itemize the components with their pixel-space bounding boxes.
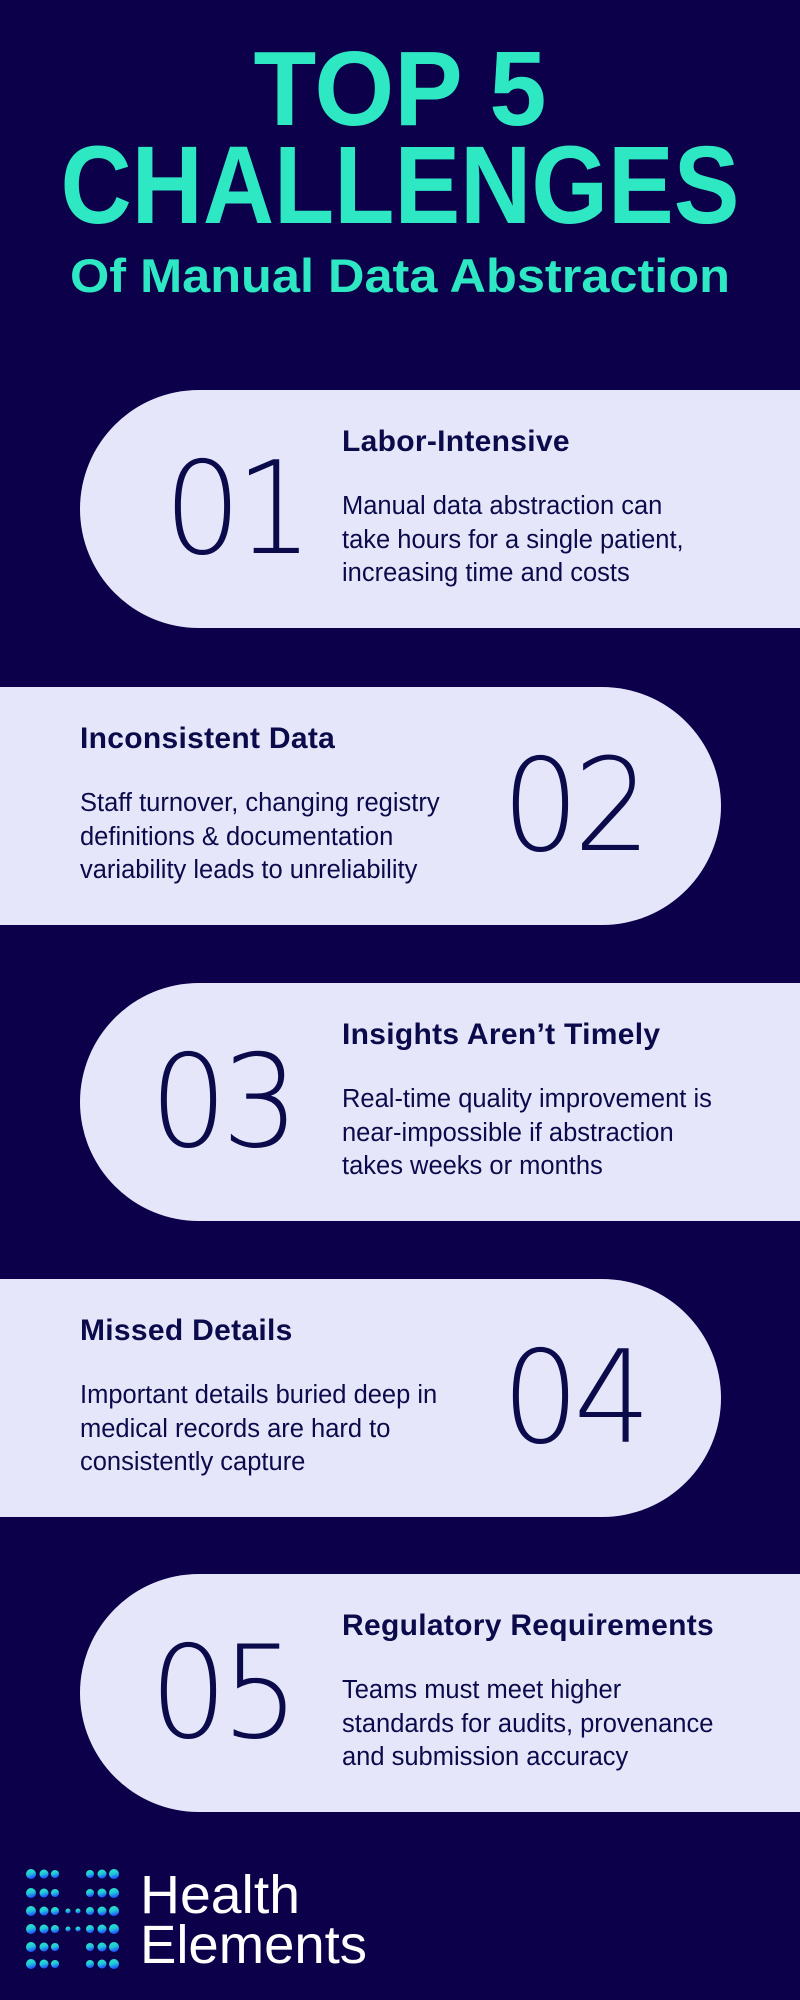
number 05: 05 (150, 1619, 293, 1768)
heading: Regulatory Requirements (342, 1609, 714, 1642)
logo (26, 1865, 367, 1975)
heading: Inconsistent Data (80, 722, 335, 755)
icon: dots (26, 1869, 119, 1969)
title (60, 30, 740, 302)
text (342, 492, 684, 587)
text: variability leads to unreliability (80, 856, 417, 884)
text: Staff turnover, changing registry (80, 789, 440, 817)
text (80, 1381, 437, 1476)
title: Of Manual Data Abstraction (70, 249, 730, 302)
number 02: 02 (502, 732, 645, 881)
logo text: Elements (140, 1915, 367, 1975)
panel: 03 (80, 983, 800, 1221)
text (342, 1085, 712, 1180)
text: definitions & documentation (80, 822, 393, 850)
text: takes weeks or months (342, 1152, 603, 1180)
text: Manual data abstraction can (342, 492, 662, 520)
text: near-impossible if abstraction (342, 1118, 674, 1146)
text (80, 789, 440, 884)
title: TOP 5 (254, 30, 546, 148)
number 04: 04 (502, 1324, 645, 1473)
text: Important details buried deep in (80, 1381, 437, 1409)
number 03: 03 (150, 1028, 293, 1177)
text: Teams must meet higher (342, 1676, 621, 1704)
heading: Missed Details (80, 1314, 293, 1347)
text: Real-time quality improvement is (342, 1085, 712, 1113)
heading: Insights Aren’t Timely (342, 1018, 660, 1051)
panel: 02 (0, 687, 721, 925)
title: CHALLENGES (60, 124, 740, 247)
heading: Labor-Intensive (342, 425, 570, 458)
text (342, 1676, 713, 1771)
number 01: 01 (164, 435, 307, 584)
text: consistently capture (80, 1448, 305, 1476)
logo text: Health (140, 1865, 300, 1925)
panel: 05 (80, 1574, 800, 1812)
text: and submission accuracy (342, 1743, 628, 1771)
text: increasing time and costs (342, 559, 630, 587)
text: medical records are hard to (80, 1414, 390, 1442)
text: standards for audits, provenance (342, 1710, 713, 1738)
text: take hours for a single patient, (342, 526, 684, 554)
panel: 04 (0, 1279, 721, 1517)
logo text (140, 1865, 367, 1975)
panel: 01 (80, 390, 800, 628)
